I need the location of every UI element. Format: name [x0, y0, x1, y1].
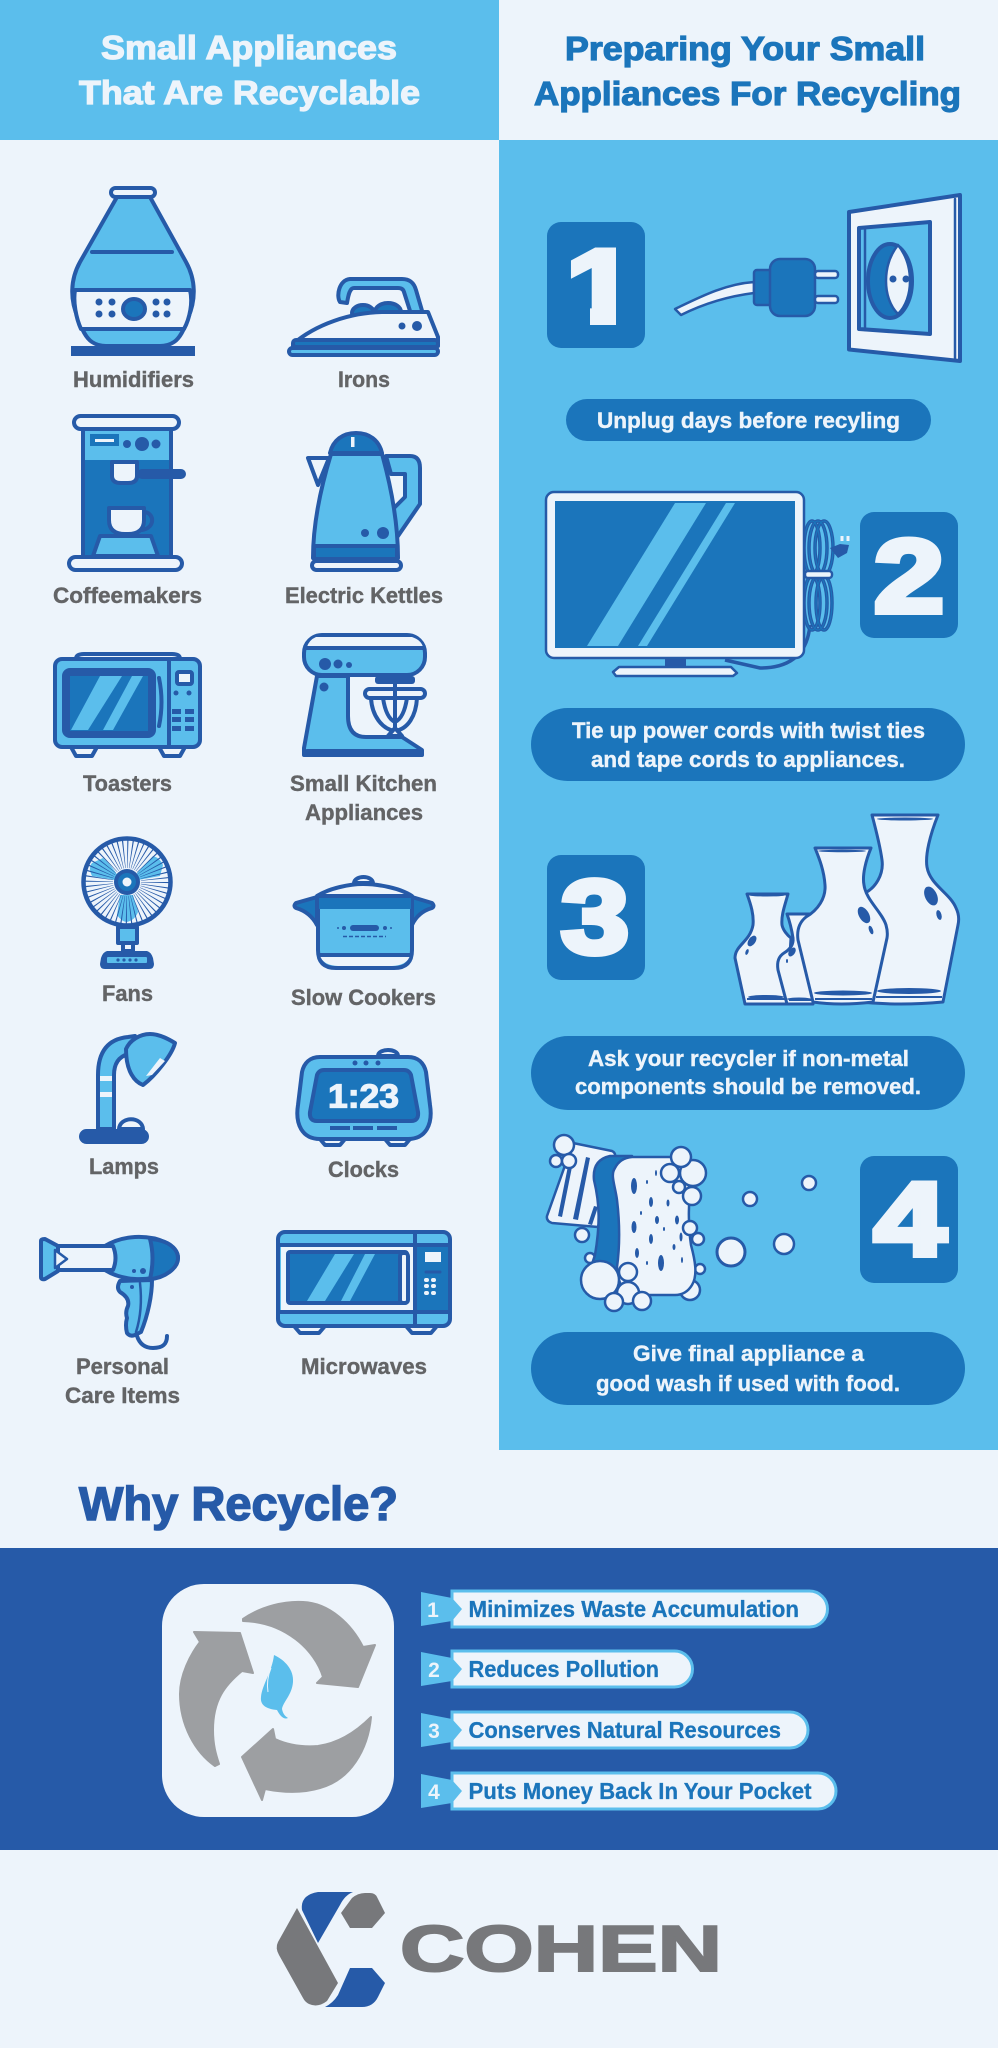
logo wordmark: COHEN — [400, 1912, 722, 1985]
heading: small appliances that are recyclable — [79, 29, 420, 111]
step 3 text pill: components should be removed. — [575, 1074, 921, 1099]
icon: television with tied cord — [546, 492, 849, 676]
icon: desk lamp — [79, 1034, 175, 1144]
heading: preparing your small appliances for recycling — [534, 30, 961, 112]
icon: slow cooker — [294, 877, 434, 968]
label: fans: Fans — [102, 981, 153, 1006]
step 1 number badge — [547, 222, 645, 348]
reason 1: 1 — [427, 1599, 439, 1622]
icon: sponge and bubbles — [547, 1135, 816, 1311]
icon: humidifier — [71, 188, 195, 356]
reason 2 — [421, 1651, 692, 1687]
label: lamps: Lamps — [89, 1154, 159, 1179]
step 4 text pill: good wash if used with food. — [596, 1371, 900, 1396]
icon: coffeemaker — [69, 416, 186, 570]
reason 2: 2 — [428, 1659, 440, 1682]
panel: why recycle band — [0, 1548, 998, 1850]
step 2 number badge — [860, 512, 958, 638]
step 2 text pill: and tape cords to appliances. — [591, 747, 905, 772]
step 3 text pill: Ask your recycler if non-metal — [588, 1046, 909, 1071]
heading: preparing your small appliances for recycling: Preparing Your Small — [565, 30, 925, 67]
heading: why recycle: Why Recycle? — [79, 1477, 398, 1530]
logo: Cohen — [277, 1892, 722, 2007]
label: small kitchen appliances: Small Kitchen — [290, 771, 437, 796]
logo mark — [277, 1892, 385, 2007]
label: small kitchen appliances: Appliances — [305, 800, 423, 825]
label: slow cookers: Slow Cookers — [291, 985, 436, 1010]
step 4 number badge: 4 — [874, 1162, 946, 1278]
step 1 number badge: 1 — [566, 229, 636, 345]
panel: recyclable appliances header — [0, 0, 499, 140]
label: coffeemakers: Coffeemakers — [53, 583, 202, 608]
reason 4: 4 — [428, 1781, 440, 1804]
label: microwaves: Microwaves — [301, 1354, 427, 1379]
label: clocks: Clocks — [328, 1157, 399, 1182]
icon: microwave — [278, 1232, 450, 1333]
step 2 text pill — [531, 708, 965, 781]
icon: electric kettle — [308, 433, 420, 570]
step 3 number badge — [547, 855, 645, 980]
label: electric kettles: Electric Kettles — [285, 583, 443, 608]
icon: stand mixer — [304, 635, 425, 756]
reason 3 — [421, 1712, 808, 1748]
icon: recycle arrows and leaf — [162, 1584, 394, 1817]
icon: iron — [289, 279, 438, 355]
heading: small appliances that are recyclable: That Are Recyclable — [79, 74, 420, 111]
label: humidifiers: Humidifiers — [73, 367, 194, 392]
heading: preparing your small appliances for recycling: Appliances For Recycling — [534, 75, 961, 112]
label: personal care items: Personal — [76, 1354, 169, 1379]
label: personal care items — [65, 1354, 180, 1408]
icon: hair dryer — [41, 1237, 178, 1348]
step 4 text pill — [531, 1332, 965, 1405]
reason 3: Conserves Natural Resources — [468, 1717, 781, 1743]
panel: appliance list — [41, 188, 450, 1408]
icon: vases — [735, 815, 959, 1004]
reason 1: Minimizes Waste Accumulation — [468, 1596, 799, 1622]
step 1 text pill: Unplug days before recyling — [597, 408, 900, 433]
step 2 text pill: Tie up power cords with twist ties — [572, 718, 925, 743]
icon: desk fan — [84, 838, 170, 969]
label: small kitchen appliances — [290, 771, 437, 825]
panel: preparing steps — [499, 140, 998, 1450]
reason 4 — [421, 1773, 836, 1809]
heading: small appliances that are recyclable: Small Appliances — [101, 29, 397, 66]
step 1 text pill — [566, 399, 931, 441]
label: irons: Irons — [338, 367, 390, 392]
icon: toaster oven — [55, 654, 200, 756]
icon: digital clock — [297, 1050, 431, 1145]
reason 1 — [421, 1591, 828, 1627]
label: personal care items: Care Items — [65, 1383, 180, 1408]
label: toasters: Toasters — [83, 771, 172, 796]
step 2 number badge: 2 — [874, 519, 944, 635]
step 4 number badge — [860, 1156, 958, 1283]
step 4 text pill: Give final appliance a — [633, 1341, 865, 1366]
step 3 text pill — [531, 1036, 965, 1110]
step 3 number badge: 3 — [561, 860, 629, 976]
reason 2: Reduces Pollution — [468, 1656, 659, 1682]
reason 3: 3 — [428, 1720, 440, 1743]
clock time: 1:23 — [328, 1078, 399, 1114]
icon: plug and socket — [675, 195, 960, 361]
reason 4: Puts Money Back In Your Pocket — [468, 1778, 812, 1804]
